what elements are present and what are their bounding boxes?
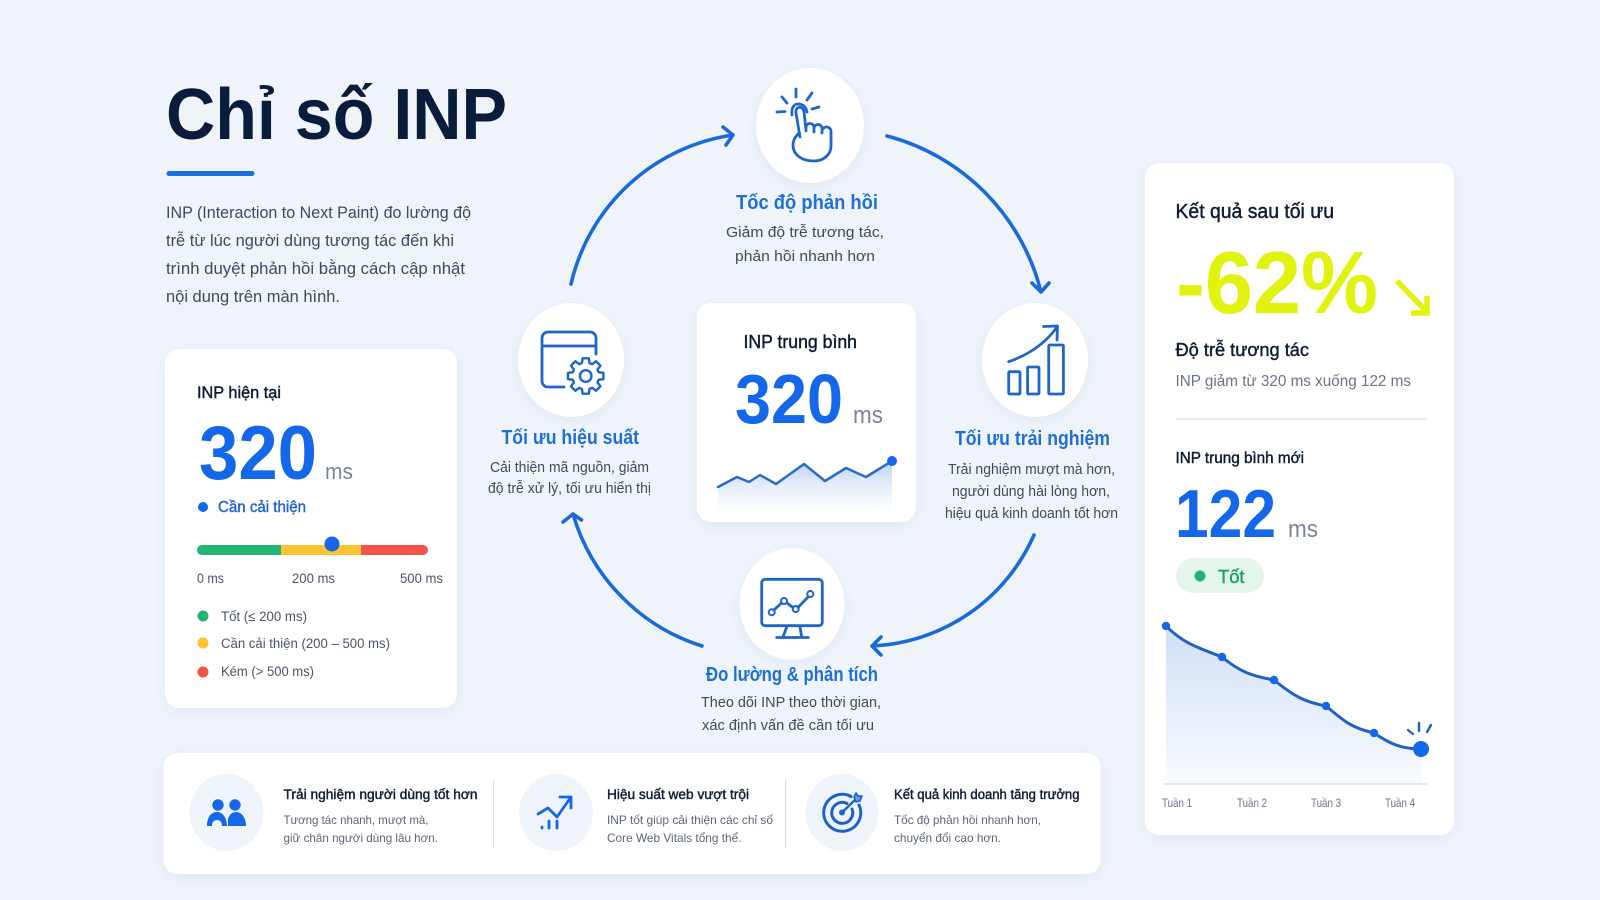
step description: Trải nghiệm mượt mà hơn,	[948, 462, 1115, 478]
step description: phản hồi nhanh hơn	[735, 248, 875, 265]
current value: 320	[199, 411, 317, 496]
average value: ms	[853, 402, 883, 429]
icon: monitor chart	[762, 579, 822, 638]
benefit: user experience	[190, 774, 478, 851]
icon: window with gear	[542, 332, 603, 394]
current value: ms	[325, 459, 353, 484]
benefit description: Tương tác nhanh, mượt mà,	[284, 813, 428, 827]
panel: results after optimisation	[1145, 163, 1454, 835]
benefit description	[607, 813, 773, 845]
benefit heading: Hiệu suất web vượt trội	[607, 787, 749, 802]
icon: users	[207, 799, 246, 826]
benefit description: INP tốt giúp cải thiện các chỉ số	[607, 813, 773, 827]
gauge bar	[197, 536, 428, 555]
intro text: INP (Interaction to Next Paint) đo lường độ	[166, 204, 471, 222]
benefit description: chuyển đổi cao hơn.	[894, 831, 1001, 845]
step description: Cải thiện mã nguồn, giảm	[490, 460, 649, 476]
benefit description: giữ chân người dùng lâu hơn.	[284, 831, 438, 845]
step description: người dùng hài lòng hơn,	[952, 484, 1110, 500]
legend	[198, 609, 390, 679]
step description: xác định vấn đề cần tối ưu	[702, 717, 874, 734]
reduction figure: -62%	[1176, 233, 1378, 332]
week labels: Tuần 4	[1385, 796, 1415, 810]
step description: Theo dõi INP theo thời gian,	[701, 694, 881, 711]
status pill: Tốt	[1218, 567, 1244, 587]
intro text: trễ từ lúc người dùng tương tác đến khi	[166, 231, 454, 250]
panel heading: INP trung bình	[744, 332, 857, 352]
benefit description	[284, 813, 438, 845]
panel: benefits	[164, 753, 1100, 874]
divider lines	[494, 780, 786, 848]
icon: trend arrow	[538, 797, 571, 828]
step description	[945, 462, 1118, 522]
week labels	[1162, 796, 1415, 810]
sparkline	[718, 456, 897, 512]
icon: growth bars	[1009, 326, 1063, 394]
benefit: business results	[806, 774, 1080, 851]
title underline	[166, 171, 254, 176]
step heading: Tối ưu trải nghiệm	[955, 428, 1110, 450]
panel heading: Kết quả sau tối ưu	[1176, 201, 1334, 223]
gauge scale: 500 ms	[400, 571, 443, 586]
arrow: down right	[1397, 281, 1427, 313]
title: Chỉ số INP	[166, 75, 507, 155]
gauge scale	[197, 571, 443, 586]
week labels: Tuần 3	[1311, 796, 1341, 810]
step heading: Tốc độ phản hồi	[736, 192, 878, 214]
step: performance optimisation	[488, 303, 651, 497]
week labels: Tuần 1	[1162, 796, 1192, 810]
step description	[726, 224, 884, 265]
panel: average INP	[697, 303, 916, 522]
legend: Cần cải thiện (200 – 500 ms)	[221, 636, 390, 651]
step description: hiệu quả kinh doanh tốt hơn	[945, 506, 1118, 522]
status: Cần cải thiện	[218, 499, 306, 516]
step: measure and analyse	[701, 548, 881, 734]
new average label: INP trung bình mới	[1176, 450, 1304, 467]
icon: tapping hand	[777, 89, 831, 161]
step heading: Tối ưu hiệu suất	[502, 427, 639, 449]
icon: target	[824, 793, 862, 831]
benefit description	[894, 813, 1041, 845]
step description	[701, 694, 881, 734]
new average value: ms	[1288, 516, 1318, 543]
step: response speed	[726, 68, 884, 265]
new average value: 122	[1175, 476, 1276, 552]
benefit: web performance	[519, 774, 773, 851]
legend: Tốt (≤ 200 ms)	[221, 609, 307, 624]
intro text: nội dung trên màn hình.	[166, 288, 340, 306]
step: experience optimisation	[945, 303, 1118, 522]
step heading: Đo lường & phân tích	[706, 664, 878, 686]
line chart	[1162, 622, 1431, 784]
metric label: Độ trễ tương tác	[1176, 339, 1309, 360]
step description	[488, 460, 651, 497]
intro text: trình duyệt phản hồi bằng cách cập nhật	[166, 259, 465, 278]
benefit heading: Kết quả kinh doanh tăng trưởng	[894, 787, 1080, 802]
cycle arrows	[563, 127, 1049, 655]
benefit heading: Trải nghiệm người dùng tốt hơn	[284, 787, 478, 802]
average value: 320	[735, 360, 843, 438]
week labels: Tuần 2	[1237, 796, 1267, 810]
gauge scale: 0 ms	[197, 571, 224, 586]
intro text	[166, 204, 471, 306]
status pill	[1176, 558, 1264, 593]
panel heading: INP hiện tại	[197, 384, 281, 402]
step description: Giảm độ trễ tương tác,	[726, 224, 884, 241]
step description: độ trễ xử lý, tối ưu hiển thị	[488, 480, 651, 497]
gauge scale: 200 ms	[292, 571, 335, 586]
metric description: INP giảm từ 320 ms xuống 122 ms	[1176, 373, 1411, 390]
panel: current INP	[165, 349, 457, 708]
legend: Kém (> 500 ms)	[221, 664, 314, 679]
benefit description: Tốc độ phản hồi nhanh hơn,	[894, 813, 1041, 827]
benefit description: Core Web Vitals tổng thể.	[607, 831, 742, 845]
